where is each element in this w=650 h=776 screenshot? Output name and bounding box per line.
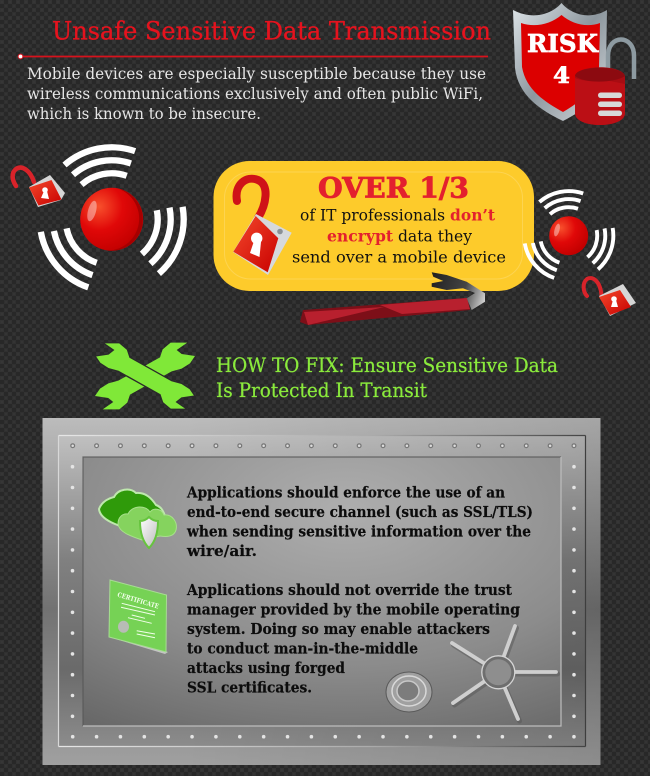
- stat description: send over a mobile device: [292, 248, 506, 266]
- stat description: of IT professionals don’t: [300, 206, 496, 224]
- intro text: Mobile devices are especially susceptible because they use: [27, 64, 486, 83]
- stat callout panel: [214, 161, 534, 291]
- icon: large open lock: [233, 179, 292, 275]
- vault door panel: [42, 418, 600, 765]
- padlock: [575, 40, 634, 125]
- first fix text: Applications should enforce the use of an: [186, 484, 505, 502]
- intro text: which is known to be insecure.: [27, 104, 261, 123]
- second fix text: attacks using forged: [187, 660, 345, 677]
- crowbar: [300, 272, 485, 325]
- stat description: encrypt data they: [327, 226, 472, 246]
- second fix text: manager provided by the mobile operating: [187, 602, 520, 618]
- first fix text: when sending sensitive information over the: [186, 524, 531, 540]
- icon: cloud with shield: [99, 490, 176, 548]
- icon: certificate: CERTIFICATE: [116, 591, 160, 611]
- intro text: wireless communications exclusively and often public WiFi,: [27, 84, 483, 103]
- second fix text: [186, 582, 520, 696]
- second fix text: system. Doing so may enable attackers: [187, 621, 490, 638]
- icon: certificate: [109, 580, 168, 654]
- intro text: [27, 64, 486, 123]
- shield: 4: [553, 63, 570, 89]
- icon: crossed wrenches: [95, 343, 195, 409]
- title: Unsafe Sensitive Data Transmission: [52, 16, 491, 46]
- rivets: [72, 446, 575, 737]
- headline stat: OVER 1/3: [318, 172, 469, 204]
- risk badge: shield with padlock: [513, 3, 634, 125]
- stat description: [292, 206, 506, 266]
- title rule: [18, 54, 488, 59]
- shield: [513, 3, 607, 121]
- how to fix heading: Is Protected In Transit: [216, 379, 427, 402]
- first fix text: [186, 484, 533, 560]
- first fix text: wire/air.: [186, 543, 257, 560]
- large wifi beacon: [41, 147, 184, 287]
- shield: RISK: [527, 29, 600, 58]
- small open lock, right: [584, 278, 636, 316]
- how to fix heading: HOW TO FIX: Ensure Sensitive Data: [216, 354, 558, 377]
- second fix text: SSL certificates.: [187, 680, 312, 696]
- vault dial: [386, 672, 432, 712]
- second fix text: to conduct man-in-the-middle: [187, 640, 418, 658]
- small wifi beacon: [525, 191, 613, 278]
- first fix text: end-to-end secure channel (such as SSL/TLS): [187, 504, 533, 521]
- vault handle: [452, 626, 558, 721]
- second fix text: Applications should not override the trust: [186, 582, 512, 599]
- small open lock, left: [13, 168, 65, 207]
- how to fix heading: [216, 354, 558, 402]
